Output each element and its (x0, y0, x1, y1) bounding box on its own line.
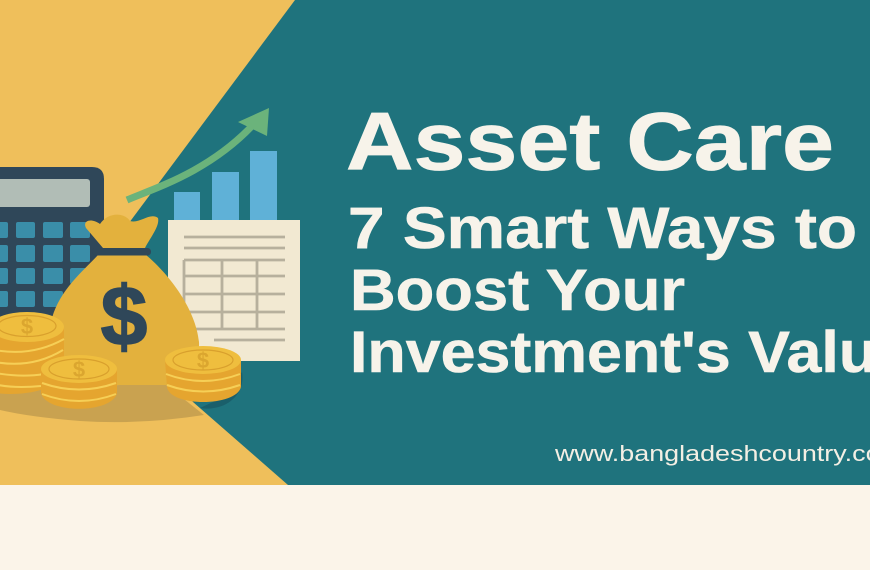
document with table (168, 220, 300, 361)
coin stack: left (0, 312, 64, 394)
coin stack: middle: $ (73, 357, 85, 382)
icon: calculator (0, 167, 104, 320)
website url: www.bangladeshcountry.com (554, 441, 870, 466)
floor shadow (0, 384, 204, 422)
coin stack: middle (41, 355, 117, 409)
banner panel: yellow (0, 0, 300, 485)
arrow: growth trend (127, 108, 269, 200)
bar chart (174, 151, 277, 222)
bag tie (92, 248, 151, 256)
dollar sign: $ (101, 269, 147, 363)
subtitle (348, 196, 870, 385)
icon: money bag (51, 215, 199, 385)
coin stack: left: $ (21, 314, 33, 339)
coin stack: right: $ (197, 348, 209, 373)
title: Asset Care (346, 96, 834, 188)
subtitle: Investment's Value (350, 320, 870, 385)
subtitle: Boost Your (350, 258, 685, 323)
subtitle: 7 Smart Ways to (348, 196, 857, 261)
coin stack: right (165, 346, 242, 409)
banner panel: teal (120, 0, 870, 485)
